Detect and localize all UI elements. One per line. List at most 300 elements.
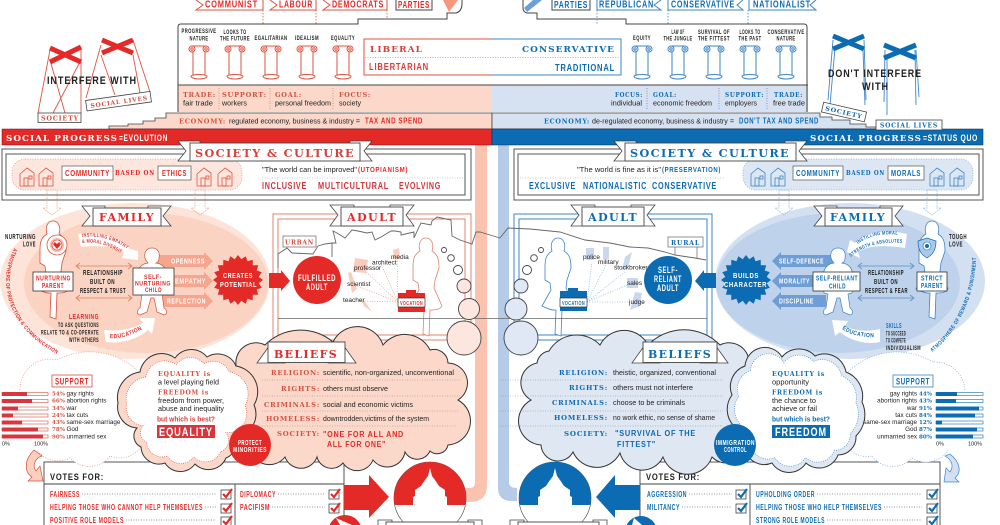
hills xyxy=(500,228,706,260)
social progress band left: =EVOLUTION xyxy=(119,133,168,143)
left pillars: NATURE xyxy=(190,36,208,42)
percentages: 24% xyxy=(52,413,66,419)
occupations: scientist xyxy=(347,281,371,288)
community pill: COMMUNITY xyxy=(65,169,110,178)
equality cloud: a level playing field xyxy=(158,380,219,386)
community pill: ETHICS xyxy=(162,169,187,178)
parent figure xyxy=(916,221,948,319)
burst: creates potential xyxy=(213,255,263,305)
banner: beliefs right xyxy=(632,342,728,363)
left info strip: workers xyxy=(221,100,247,108)
percentages: 78% xyxy=(52,427,66,433)
parent figure xyxy=(37,221,69,319)
vocation case xyxy=(398,290,425,312)
self reliant adult: SELF- xyxy=(658,265,678,275)
relationship: BUILT ON xyxy=(90,277,115,286)
interfere right xyxy=(821,36,942,130)
freedom cloud: FREEDOM is xyxy=(772,388,823,396)
learning xyxy=(41,312,99,344)
figure xyxy=(542,238,574,336)
occupations: sales xyxy=(627,280,643,287)
occupations: police xyxy=(583,254,600,261)
occupations xyxy=(583,254,648,306)
beliefs cloud left: others must observe xyxy=(323,386,388,393)
child: NURTURING xyxy=(135,280,171,288)
percentages: 87% xyxy=(919,427,933,433)
percentages: 84% xyxy=(919,413,933,419)
right info strip: employers xyxy=(725,100,757,108)
occupations: military xyxy=(598,259,619,266)
right info strip: TRADE: xyxy=(774,91,803,99)
left info strip xyxy=(178,85,492,112)
support cloud right: SUPPORT xyxy=(896,376,930,386)
right pillars: CONSERVATIVE xyxy=(768,30,804,36)
atmosphere text: ATMOSPHERE OF PROTECTION & COMMUNICATION xyxy=(6,248,58,354)
right economy strip: ECONOMY: xyxy=(544,118,590,126)
community pill: BASED ON xyxy=(115,170,155,177)
burst: builds character: CHARACTER xyxy=(724,280,767,289)
beliefs cloud right: FITTEST" xyxy=(617,440,656,449)
rays xyxy=(587,262,628,302)
skills: TO SUCCEED xyxy=(886,332,906,338)
burst: creates potential: POTENTIAL xyxy=(220,280,257,289)
burst: builds character xyxy=(721,255,771,305)
percentages: 66% xyxy=(52,398,66,404)
right pillars: LAW OF xyxy=(672,30,684,36)
issues: unmarried sex xyxy=(877,434,918,440)
atmosphere text: ATMOSPHERE OF REWARD & PUNISHMENT xyxy=(930,258,976,352)
issues: God xyxy=(905,426,917,433)
quality arrows xyxy=(158,252,213,310)
votes right: UPHOLDING ORDER xyxy=(756,490,815,499)
society panel right: CONSERVATIVE xyxy=(652,181,717,192)
beliefs cloud right: CRIMINALS: xyxy=(552,399,608,407)
society panel right: "The world is fine as it is" xyxy=(577,167,662,174)
issues xyxy=(863,390,918,440)
occupations: stockbroker xyxy=(614,264,648,272)
quality arrows: DISCIPLINE xyxy=(779,296,814,306)
nurturing parent label: PARENT xyxy=(42,283,64,290)
left economy strip: regulated economy, business & industry = xyxy=(229,118,360,126)
beliefs cloud left: RIGHTS: xyxy=(281,385,320,393)
learning: WITH OTHERS xyxy=(69,338,99,344)
freedom cloud xyxy=(727,347,865,472)
child: SELF-RELIANT xyxy=(816,276,858,282)
beliefs cloud right: others must not interfere xyxy=(613,385,693,392)
beliefs cloud right: theistic, organized, conventional xyxy=(613,370,716,377)
banner xyxy=(330,205,414,226)
occupations: professor xyxy=(354,265,382,272)
right pillars: NATURE xyxy=(776,36,796,42)
beliefs cloud left: HOMELESS: xyxy=(266,415,320,423)
ideology box: LIBERTARIAN xyxy=(369,61,429,73)
left info strip: fair trade xyxy=(183,100,213,108)
immigration control badge: CONTROL xyxy=(724,445,747,454)
right info strip xyxy=(178,85,808,112)
capitol banner xyxy=(378,520,482,525)
issues: unmarried sex xyxy=(66,434,107,440)
education arrow: EDUCATION xyxy=(110,326,142,338)
banner: beliefs left: BELIEFS xyxy=(274,348,338,361)
quality arrows: SELF-DEFENCE xyxy=(779,256,824,266)
education arrow: EDUCATION xyxy=(842,326,874,338)
interfere right: DON'T INTERFERE xyxy=(828,68,922,80)
percentages xyxy=(52,392,66,440)
freedom cloud: EQUALITY is xyxy=(772,370,825,378)
ribbons: left party labels: PARTIES xyxy=(398,0,430,11)
right info strip: individual xyxy=(611,100,642,108)
beliefs cloud left xyxy=(236,327,470,471)
issues: same-sex marriage xyxy=(863,419,917,426)
arrow to adult xyxy=(269,270,290,291)
equality cloud: FREEDOM is xyxy=(158,388,209,396)
beliefs cloud left: SOCIETY: xyxy=(277,430,320,438)
rays xyxy=(352,255,398,302)
percentages: 90% xyxy=(52,434,66,440)
banner: beliefs left xyxy=(257,342,356,363)
community pill: COMMUNITY xyxy=(796,169,840,178)
votes left: FAIRNESS xyxy=(50,490,80,499)
issues: tax cuts xyxy=(895,412,917,419)
beliefs cloud left: scientific, non-organized, unconventional xyxy=(323,370,454,377)
center strips xyxy=(462,145,517,502)
curved arrow left xyxy=(26,450,43,481)
urban label: URBAN xyxy=(285,238,314,246)
instilling arrow xyxy=(78,233,138,260)
support cloud right: 100% xyxy=(968,442,982,448)
freedom cloud: but which is best? xyxy=(772,416,830,424)
left info strip: society xyxy=(339,100,361,108)
immigration control badge xyxy=(714,424,756,466)
left economy strip: ECONOMY: xyxy=(179,118,226,126)
learning: TO ASK QUESTIONS xyxy=(58,323,99,329)
beliefs cloud right: RIGHTS: xyxy=(569,384,608,392)
percentages: 54% xyxy=(52,392,66,398)
occupations: architect xyxy=(372,260,397,266)
relationship: RELATIONSHIP xyxy=(868,268,904,277)
equality cloud: but which is best? xyxy=(157,416,215,424)
beliefs cloud right: HOMELESS: xyxy=(554,414,608,422)
support cloud right: 0% xyxy=(936,442,944,448)
relationship: RESPECT & FEAR xyxy=(865,286,908,295)
instilling arrow: INSTILLING MORAL xyxy=(856,231,898,244)
percentages: 43% xyxy=(919,398,933,404)
equality cloud: EQUALITY is xyxy=(158,370,211,378)
equality cloud: EQUALITY xyxy=(159,427,213,439)
society panel left: INCLUSIVE xyxy=(262,181,307,192)
curved arrow right xyxy=(944,454,959,482)
votes left: HELPING THOSE WHO CANNOT HELP THEMSELVES xyxy=(50,503,203,512)
social progress band right xyxy=(492,129,983,145)
left pillars: LOOKS TO xyxy=(224,30,246,36)
issues: tax cuts xyxy=(66,412,88,419)
rural label: RURAL xyxy=(671,239,700,247)
occupation shapes xyxy=(348,248,400,312)
right info strip: FOCUS: xyxy=(615,91,643,99)
right pillars: SURVIVAL OF xyxy=(698,30,730,36)
society panel left: MULTICULTURAL xyxy=(318,181,389,192)
community pill: MORALS xyxy=(891,169,921,178)
votes right: AGGRESSION xyxy=(647,490,687,499)
child xyxy=(813,248,860,315)
quality arrows: EMPATHY xyxy=(175,276,206,286)
adult panel left xyxy=(269,205,500,340)
protect minorities badge: MINORITIES xyxy=(233,445,267,454)
left pillars: THE FUTURE xyxy=(220,36,250,42)
issues: God xyxy=(66,426,79,433)
right info strip: economic freedom xyxy=(653,100,712,108)
beliefs cloud left: CRIMINALS: xyxy=(264,401,320,409)
percentages xyxy=(919,392,933,440)
left economy strip: TAX AND SPEND xyxy=(365,116,423,126)
vocation case: VOCATION xyxy=(562,301,585,307)
left pillars: EQUALITY xyxy=(331,36,355,42)
beliefs cloud right: no work ethic, no sense of shame xyxy=(613,415,715,422)
votes left xyxy=(44,462,344,525)
beliefs cloud right: RELIGION: xyxy=(559,369,608,377)
fulfilled adult: FULFILLED xyxy=(298,273,336,283)
ideology box xyxy=(364,39,621,75)
percentages: 44% xyxy=(919,392,933,398)
left info strip: FOCUS: xyxy=(339,91,371,99)
beliefs cloud left: downtrodden,victims of the system xyxy=(323,416,429,423)
relationship: BUILT ON xyxy=(874,277,898,286)
thought circles xyxy=(442,248,544,355)
left economy strip xyxy=(109,113,492,129)
label: social lives: SOCIAL LIVES xyxy=(90,95,148,110)
society panel left: EVOLVING xyxy=(399,181,441,192)
percentages: 43% xyxy=(52,420,66,426)
family banner xyxy=(814,206,903,226)
beliefs cloud left: social and economic victims xyxy=(323,402,414,409)
beliefs cloud left: ALL FOR ONE" xyxy=(327,440,386,449)
social progress band left xyxy=(2,129,492,145)
child xyxy=(133,248,174,315)
family right: LOVE xyxy=(949,240,963,248)
society panel right: (PRESERVATION) xyxy=(662,165,721,174)
left info strip: TRADE: xyxy=(183,91,216,99)
quality arrows xyxy=(772,252,833,310)
skills: INDIVIDUALISM xyxy=(886,346,921,352)
label: society: SOCIETY xyxy=(824,105,863,121)
relationship xyxy=(76,263,132,301)
issues: same-sex marriage xyxy=(66,419,121,426)
protect minorities badge xyxy=(229,424,271,466)
community pill: BASED ON xyxy=(846,170,885,177)
right info strip: free trade xyxy=(773,100,805,108)
protect minorities badge: PROTECT xyxy=(238,438,262,447)
bars xyxy=(936,392,983,438)
child: SELF- xyxy=(144,274,162,281)
quality arrows: MORALITY xyxy=(779,276,810,286)
left pillars: PROGRESSIVE xyxy=(182,29,216,35)
family banner: FAMILY xyxy=(99,211,155,224)
occupations: judge xyxy=(628,299,645,306)
skills xyxy=(886,321,921,352)
votes right: HELPING THOSE WHO HELP THEMSELVES xyxy=(756,503,882,512)
learning: RELATE TO & CO-OPERATE xyxy=(41,330,99,336)
capitol right xyxy=(510,462,657,525)
support cloud left: SUPPORT xyxy=(55,376,89,386)
beliefs cloud right: "SURVIVAL OF THE xyxy=(615,429,696,438)
capitol banner xyxy=(510,520,607,525)
society panel right: EXCLUSIVE xyxy=(529,181,576,192)
ribbons: left party labels xyxy=(196,0,432,24)
family banner xyxy=(82,206,171,226)
issues: abortion rights xyxy=(66,398,106,404)
beliefs cloud left: RELIGION: xyxy=(271,369,320,377)
burst: builds character: BUILDS xyxy=(733,271,759,280)
community pill xyxy=(743,159,973,190)
right economy strip: DON'T TAX AND SPEND xyxy=(739,116,819,126)
adult panel right xyxy=(500,205,716,340)
society panel left: "The world can be improved" xyxy=(262,167,358,174)
votes left: PACIFISM xyxy=(240,503,270,512)
relationship: RESPECT & TRUST xyxy=(80,286,126,295)
beliefs cloud right: SOCIETY: xyxy=(564,430,608,438)
ribbons: right party labels: PARTIES xyxy=(554,0,588,11)
capitol left xyxy=(328,462,482,525)
right pillars: THE PAST xyxy=(738,36,762,42)
issues: gay rights xyxy=(890,390,917,398)
right info strip: GOAL: xyxy=(653,91,677,99)
quality arrows: REFLECTION xyxy=(167,296,206,306)
left info strip: GOAL: xyxy=(275,91,302,99)
label: society: SOCIETY xyxy=(41,116,79,122)
self reliant adult xyxy=(644,256,692,304)
learning: LEARNING xyxy=(69,312,99,321)
family banner: FAMILY xyxy=(830,211,886,224)
occupations: media xyxy=(391,254,409,261)
equality cloud: abuse and inequality xyxy=(158,406,225,413)
family left: NURTURING xyxy=(5,232,36,241)
social progress band right: =STATUS QUO xyxy=(923,133,978,143)
self reliant adult: RELIANT xyxy=(654,274,682,284)
label: social lives: SOCIAL LIVES xyxy=(880,122,938,130)
interfere left xyxy=(38,40,151,122)
issues: war xyxy=(906,405,917,412)
urban label xyxy=(283,236,316,247)
vocation case xyxy=(560,288,587,311)
freedom cloud: opportunity xyxy=(772,380,810,386)
self reliant adult: ADULT xyxy=(657,283,679,293)
percentages: 80% xyxy=(919,434,933,440)
left info strip: personal freedom xyxy=(275,100,331,108)
issues: gay rights xyxy=(66,390,94,398)
family left: LOVE xyxy=(23,240,36,248)
occupations xyxy=(343,254,409,304)
fulfilled adult xyxy=(293,256,341,304)
skills: SKILLS xyxy=(886,321,902,330)
relationship: RELATIONSHIP xyxy=(83,268,123,277)
community pill xyxy=(12,159,242,190)
child: CHILD xyxy=(145,287,162,294)
family right: TOUGH xyxy=(949,232,967,241)
strict parent label: STRICT xyxy=(921,276,943,282)
equality cloud: freedom from power, xyxy=(158,398,224,405)
family right xyxy=(716,190,985,359)
beliefs cloud right: choose to be criminals xyxy=(613,400,686,407)
strict parent label xyxy=(917,272,947,291)
nurturing parent label: NURTURING xyxy=(36,276,71,282)
right pillars: THE JUNGLE xyxy=(664,36,692,42)
beliefs cloud left: "ONE FOR ALL AND xyxy=(323,430,404,439)
strict parent label: PARENT xyxy=(921,283,943,290)
instilling arrow: & MORAL DIVERSITY xyxy=(82,239,122,253)
society panel left xyxy=(2,149,471,200)
support cloud left: 0% xyxy=(2,442,10,448)
relationship xyxy=(858,263,914,301)
votes left: POSITIVE ROLE MODELS xyxy=(50,516,124,525)
votes left: DIPLOMACY xyxy=(240,490,276,499)
right pillars xyxy=(632,30,804,79)
banner: society and culture left xyxy=(178,141,372,161)
support cloud left xyxy=(2,352,145,466)
society panel left: (UTOPIANISM) xyxy=(358,165,408,174)
ground line xyxy=(278,318,707,320)
arrow to adult xyxy=(695,270,716,291)
banner: ADULT xyxy=(587,211,638,224)
nurturing parent label xyxy=(33,272,73,291)
freedom cloud: achieve or fail xyxy=(772,406,817,413)
left pillars xyxy=(182,29,355,79)
freedom cloud: the chance to xyxy=(772,398,816,405)
right pillars: LOOKS TO xyxy=(740,30,760,36)
support cloud left: 100% xyxy=(34,442,48,448)
instilling arrow: STRENGTH & ABSOLUTES xyxy=(849,239,902,256)
percentages: 34% xyxy=(52,406,66,412)
votes right xyxy=(640,462,940,525)
main panel outline xyxy=(178,0,807,85)
right pillars: EQUITY xyxy=(633,36,651,42)
fulfilled adult: ADULT xyxy=(306,282,328,292)
votes right: STRONG ROLE MODELS xyxy=(756,516,825,525)
banner: society and culture right: SOCIETY & CULTURE xyxy=(630,146,790,160)
rural label xyxy=(668,237,703,258)
banner: beliefs right: BELIEFS xyxy=(648,348,712,361)
left info strip: SUPPORT: xyxy=(222,91,267,99)
right info strip: SUPPORT: xyxy=(725,91,764,99)
social progress band right: SOCIAL PROGRESS xyxy=(810,134,922,144)
instilling arrow xyxy=(847,231,907,258)
child: CHILD xyxy=(829,284,846,290)
beliefs cloud right xyxy=(500,330,749,474)
votes right: MILITANCY xyxy=(647,503,680,512)
interfere left: INTERFERE WITH xyxy=(47,75,137,87)
issues xyxy=(66,390,121,440)
right pillars: THE FITTEST xyxy=(698,36,730,42)
banner: society and culture right xyxy=(614,141,807,161)
society panel right: NATIONALISTIC xyxy=(583,181,647,192)
immigration control badge: IMMIGRATION xyxy=(716,438,755,447)
freedom cloud: FREEDOM xyxy=(775,427,827,439)
quality arrows: OPENNESS xyxy=(171,256,205,266)
burst: creates potential: CREATES xyxy=(223,271,253,280)
figure xyxy=(410,238,442,336)
skyline xyxy=(278,217,500,268)
issues: war xyxy=(66,405,77,412)
skills: TO COMPETE xyxy=(886,338,906,344)
left pillars: EGALITARIAN xyxy=(254,36,288,42)
right economy strip xyxy=(492,113,876,129)
occupation shapes xyxy=(586,247,642,310)
bars xyxy=(2,392,48,438)
society panel right xyxy=(514,149,983,200)
banner: society and culture left: SOCIETY & CULTURE xyxy=(195,146,355,160)
ideology box: LIBERAL xyxy=(370,45,423,55)
left pillars: IDEALISM xyxy=(295,36,319,42)
votes right: VOTES FOR: xyxy=(646,472,700,483)
